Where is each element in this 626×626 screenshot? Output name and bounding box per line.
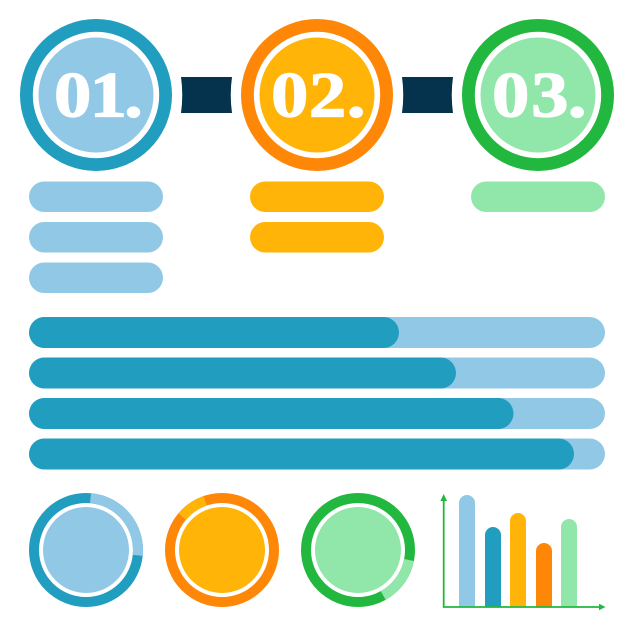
connector 1-2: [181, 77, 232, 113]
donut 3: [306, 498, 410, 602]
step 1 badge: [26, 25, 166, 165]
bars: [459, 495, 475, 607]
step 2 text placeholders: [250, 182, 384, 252]
y axis arrow: [440, 494, 447, 501]
progress bar 2: [29, 358, 605, 388]
step 3 text placeholder: [471, 182, 605, 212]
progress bar 3: [29, 398, 605, 429]
donut 2: [170, 498, 274, 602]
step 2 number: 02.: [271, 60, 366, 131]
step 2 badge: [247, 25, 387, 165]
progress bar 1: [29, 317, 605, 348]
axes: [444, 497, 600, 607]
step 3 badge: [468, 25, 608, 165]
bar chart: [440, 494, 606, 610]
x axis arrow: [599, 604, 606, 610]
progress bar 4: [29, 438, 605, 470]
progress bars: [29, 317, 605, 470]
connector 2-3: [402, 77, 453, 113]
donut 1: [34, 498, 138, 602]
step 1 number: 01.: [54, 60, 143, 131]
step 1 text placeholders: [29, 182, 163, 293]
step 3 number: 03.: [492, 60, 587, 131]
